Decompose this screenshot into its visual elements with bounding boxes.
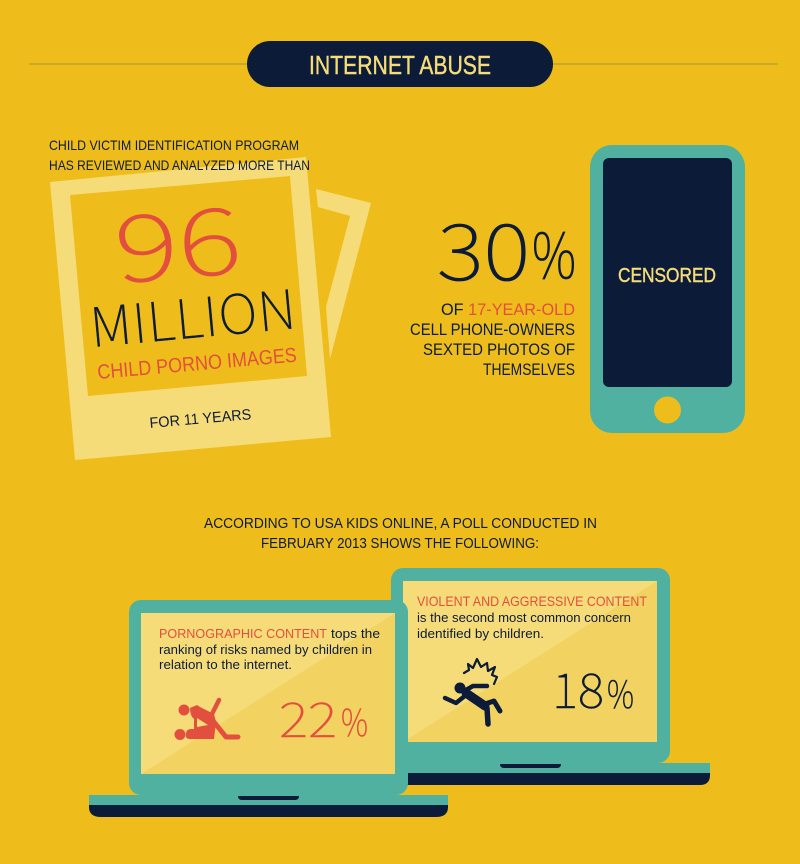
stat: million: MILLION (86, 265, 299, 363)
text: violent content description: VIOLENT AND AGGRESSIVE CONTENT (417, 593, 647, 609)
text: pornographic content description: ranking of risks named by children in (159, 643, 372, 657)
icon: phone (590, 145, 745, 433)
text: pornographic content description: PORNOGRAPHIC CONTENT (159, 626, 327, 641)
text: program intro (49, 137, 310, 173)
text: pornographic content description (159, 626, 380, 672)
stat: 22 percent: 22 (279, 681, 337, 751)
heading: internet abuse (247, 41, 553, 87)
stat: 22 percent: % (341, 693, 368, 747)
back photo (316, 189, 371, 359)
stat: 96: 96 (109, 166, 246, 310)
heading: internet abuse: INTERNET ABUSE (309, 50, 491, 80)
label: child porno images: CHILD PORNO IMAGES (96, 344, 298, 384)
panel: polaroid photos (50, 157, 371, 460)
text: violent content description (417, 593, 647, 641)
text: poll intro: ACCORDING TO USA KIDS ONLINE, A POLL CONDUCTED IN (204, 516, 597, 532)
text: sexting description: OF 17-YEAR-OLD (441, 301, 575, 319)
front photo (50, 157, 331, 460)
text: sexting description: THEMSELVES (483, 361, 575, 379)
stat: 22 percent (279, 681, 368, 751)
icon: falling person (445, 659, 500, 724)
stat: 30 percent: 30 (437, 191, 530, 303)
text: sexting description (410, 301, 575, 379)
panel: laptop violent content (391, 568, 710, 785)
stat: 18 percent (552, 652, 634, 722)
text: sexting description: SEXTED PHOTOS OF (423, 341, 575, 359)
text: poll intro: FEBRUARY 2013 SHOWS THE FOLLOWING: (261, 536, 539, 552)
text: program intro: HAS REVIEWED AND ANALYZED MORE THAN (49, 157, 310, 173)
label: for 11 years: FOR 11 YEARS (149, 406, 252, 432)
panel: laptop pornographic content (89, 600, 448, 817)
text: pornographic content description: tops the (331, 627, 380, 641)
stat: 18 percent: % (607, 664, 634, 719)
text: poll intro (204, 516, 597, 552)
icon: couple (174, 700, 238, 740)
label: censored: CENSORED (618, 265, 716, 287)
stat: 18 percent: 18 (552, 652, 604, 722)
text: program intro: CHILD VICTIM IDENTIFICATION PROGRAM (49, 137, 299, 153)
text: pornographic content description: relation to the internet. (159, 658, 292, 672)
text: violent content description: identified by children. (417, 627, 544, 641)
text: violent content description: is the second most common concern (417, 611, 631, 625)
stat: 30 percent (437, 191, 576, 303)
text: sexting description: CELL PHONE-OWNERS (410, 321, 575, 339)
stat: 30 percent: % (532, 206, 576, 296)
